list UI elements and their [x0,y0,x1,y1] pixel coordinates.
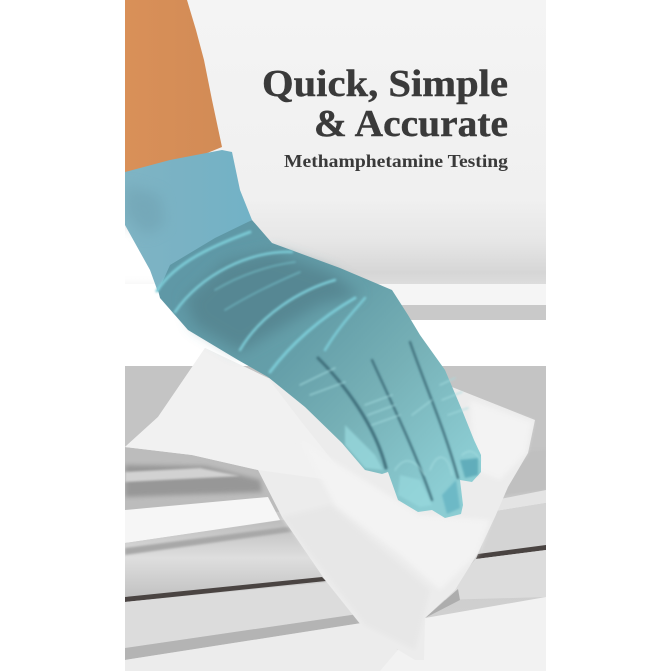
infographic canvas [125,0,546,671]
blue glove [125,150,481,518]
title [262,63,508,171]
title line 1: Quick, Simple [262,63,508,105]
glove fold highlights [157,232,365,372]
glove cuff [125,150,252,292]
cuff texture [130,193,158,228]
finger separations [318,342,458,500]
subtitle: Methamphetamine Testing [284,151,508,171]
wrist shadow [185,252,360,352]
background wall [125,0,546,320]
steel surface with rails [125,366,546,671]
glove hand silhouette [158,220,481,518]
finger wrinkles [300,368,480,475]
fingertip shading [345,425,478,514]
forearm skin [125,0,222,174]
wipe cloth [125,348,535,660]
title line 2: & Accurate [314,103,508,145]
